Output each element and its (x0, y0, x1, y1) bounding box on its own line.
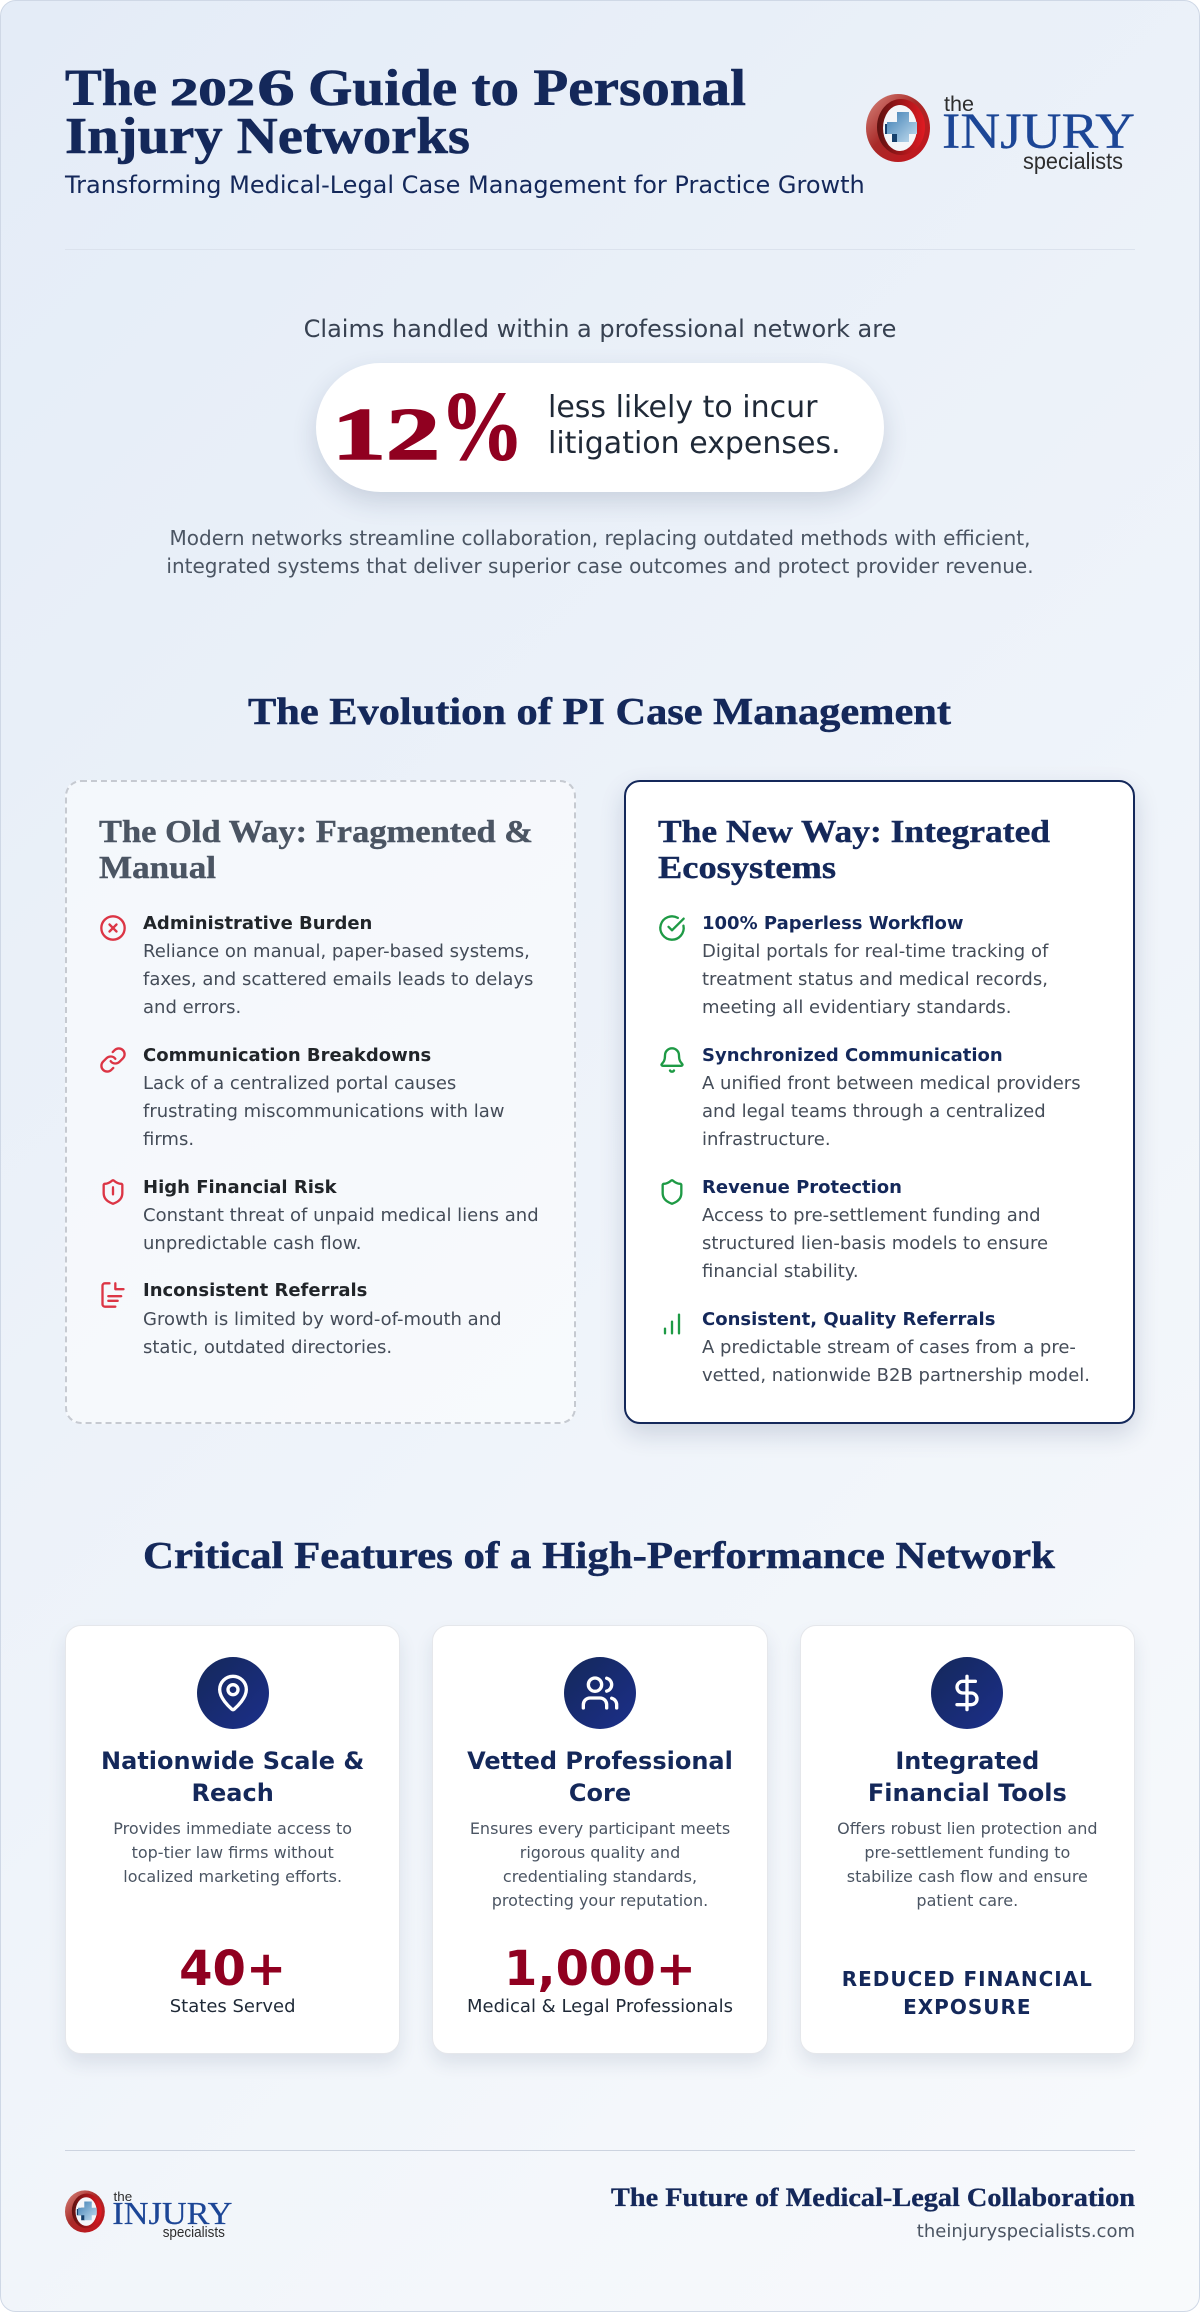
item: revenue protection: structured lien-basis models to ensure (702, 1233, 1048, 1254)
item: revenue protection: Revenue Protection (702, 1177, 902, 1198)
panel: old way (65, 780, 576, 1424)
item: paperless workflow: 100% Paperless Workflow (702, 913, 964, 934)
item: administrative burden: faxes, and scattered emails leads to delays (143, 969, 533, 990)
intro paragraph: Modern networks streamline collaboration, replacing outdated methods with efficient, (170, 526, 1030, 550)
card title: Integrated (895, 1747, 1039, 1775)
item: synchronized communication: Synchronized Communication (702, 1045, 1003, 1066)
card text (837, 1818, 1098, 1910)
item: communication breakdowns: Lack of a centralized portal causes (143, 1073, 456, 1094)
intro paragraph: integrated systems that deliver superior case outcomes and protect provider revenue. (166, 554, 1034, 578)
item: high financial risk: High Financial Risk (143, 1177, 337, 1198)
stat callout: EXPOSURE (903, 1995, 1032, 2019)
icon: users (564, 1657, 636, 1729)
icon: dollar (931, 1657, 1003, 1729)
logo: the injury specialists: the (944, 93, 974, 116)
stat text: less likely to incur (548, 390, 818, 425)
footer logo: the (114, 2189, 132, 2204)
card title: Nationwide Scale & (101, 1747, 364, 1775)
title: 202 (170, 71, 255, 114)
footer tagline: The Future of Medical-Legal Collaboration (611, 2183, 1136, 2212)
icon: ring with medical cross (866, 94, 930, 162)
card title (101, 1747, 364, 1807)
stat callout: REDUCED FINANCIAL (842, 1967, 1093, 1991)
item: inconsistent referrals: Inconsistent Referrals (143, 1280, 367, 1301)
logo: the injury specialists: specialists (1023, 148, 1123, 174)
heading: critical features: Critical Features of a High-Performance Network (143, 1535, 1056, 1577)
card: integrated financial tools (800, 1625, 1135, 2054)
item: consistent referrals: Consistent, Quality Referrals (702, 1309, 995, 1330)
item: synchronized communication: and legal teams through a centralized (702, 1101, 1046, 1122)
item: revenue protection: Access to pre-settlement funding and (702, 1205, 1041, 1226)
panel: new way: financial stability. (702, 1261, 859, 1282)
card text (470, 1818, 730, 1910)
title: Injury Networks (65, 108, 470, 165)
card text: localized marketing efforts. (123, 1866, 342, 1886)
stat text (548, 390, 841, 461)
footer logo: INJURY (112, 2196, 232, 2231)
card text: credentialing standards, (503, 1866, 697, 1886)
card text: pre-settlement funding to (864, 1842, 1070, 1862)
item: synchronized communication (660, 1045, 1081, 1150)
panel heading (99, 813, 533, 885)
title: 6 (257, 60, 295, 117)
panel: old way: and errors. (143, 997, 241, 1018)
panel heading (658, 813, 1050, 886)
item: inconsistent referrals: Growth is limited by word-of-mouth and (143, 1309, 502, 1330)
item: consistent referrals: vetted, nationwide B2B partnership model. (702, 1365, 1090, 1386)
stat label: States Served (170, 1996, 296, 2017)
item: communication breakdowns (100, 1045, 505, 1150)
callout intro: Claims handled within a professional network are (304, 315, 896, 343)
card text (113, 1818, 352, 1886)
title: The (65, 60, 157, 117)
item: communication breakdowns: Communication Breakdowns (143, 1045, 431, 1066)
card text: protecting your reputation. (492, 1890, 708, 1910)
card title: Vetted Professional (467, 1747, 733, 1775)
panel: new way: infrastructure. (702, 1129, 831, 1150)
item: high financial risk: unpredictable cash flow. (143, 1233, 362, 1254)
card text: patient care. (916, 1890, 1018, 1910)
panel: old way: firms. (143, 1129, 194, 1150)
footer logo (65, 2189, 232, 2241)
stat label: Medical & Legal Professionals (467, 1996, 733, 2017)
big stat: 12%: % (440, 372, 524, 481)
item: synchronized communication: A unified front between medical providers (702, 1073, 1081, 1094)
logo: the injury specialists: INJURY (942, 104, 1135, 160)
card text: Provides immediate access to (113, 1818, 352, 1838)
big stat: 12%: 12 (332, 394, 440, 476)
title (65, 60, 746, 165)
card title: Financial Tools (868, 1779, 1067, 1807)
intro paragraph (166, 526, 1034, 578)
logo: the injury specialists (866, 93, 1135, 174)
icon: map pin (197, 1657, 269, 1729)
subtitle: Transforming Medical-Legal Case Management for Practice Growth (65, 171, 865, 199)
item: administrative burden (100, 913, 533, 1018)
panel: new way: meeting all evidentiary standards. (702, 997, 1012, 1018)
item: high financial risk (102, 1177, 539, 1254)
stat text: litigation expenses. (548, 426, 841, 461)
item: administrative burden: Administrative Burden (143, 913, 372, 934)
item: paperless workflow (659, 913, 1049, 1018)
card title (868, 1747, 1067, 1807)
card title: Reach (192, 1779, 274, 1807)
panel heading: The Old Way: Fragmented & (99, 813, 533, 849)
card: nationwide scale (65, 1625, 400, 2054)
icon: ring with medical cross (65, 2190, 105, 2233)
card: vetted professional core (432, 1625, 768, 2054)
card text: top-tier law firms without (132, 1842, 334, 1862)
card title: Core (569, 1779, 631, 1807)
panel heading: The New Way: Integrated (658, 813, 1050, 849)
stat: 1,000+: 1,000+ (504, 1941, 696, 1997)
title: Guide to Personal (308, 60, 746, 117)
big stat: 12% (332, 372, 524, 481)
stat pill (316, 363, 884, 492)
card text: stabilize cash flow and ensure (847, 1866, 1088, 1886)
card text: Ensures every participant meets (470, 1818, 730, 1838)
panel heading: Ecosystems (658, 849, 836, 885)
heading: evolution: The Evolution of PI Case Management (248, 691, 951, 733)
item: administrative burden: Reliance on manual, paper-based systems, (143, 941, 530, 962)
item: high financial risk: Constant threat of unpaid medical liens and (143, 1205, 539, 1226)
item: inconsistent referrals: static, outdated directories. (143, 1337, 392, 1358)
footer url: theinjuryspecialists.com (917, 2221, 1135, 2242)
item: inconsistent referrals (101, 1280, 502, 1358)
item: consistent referrals: A predictable stream of cases from a pre- (702, 1337, 1076, 1358)
item: communication breakdowns: frustrating miscommunications with law (143, 1101, 505, 1122)
stat: 40+: 40+ (179, 1941, 286, 1997)
panel heading: Manual (99, 849, 216, 885)
stat callout (842, 1967, 1093, 2019)
footer logo: specialists (163, 2225, 225, 2241)
card text: Offers robust lien protection and (837, 1818, 1098, 1838)
item: paperless workflow: Digital portals for real-time tracking of (702, 941, 1048, 962)
panel: new way (624, 780, 1135, 1424)
item: consistent referrals (664, 1309, 1090, 1386)
card text: rigorous quality and (520, 1842, 680, 1862)
item: revenue protection (662, 1177, 1048, 1282)
item: paperless workflow: treatment status and medical records, (702, 969, 1048, 990)
card title (467, 1747, 733, 1807)
